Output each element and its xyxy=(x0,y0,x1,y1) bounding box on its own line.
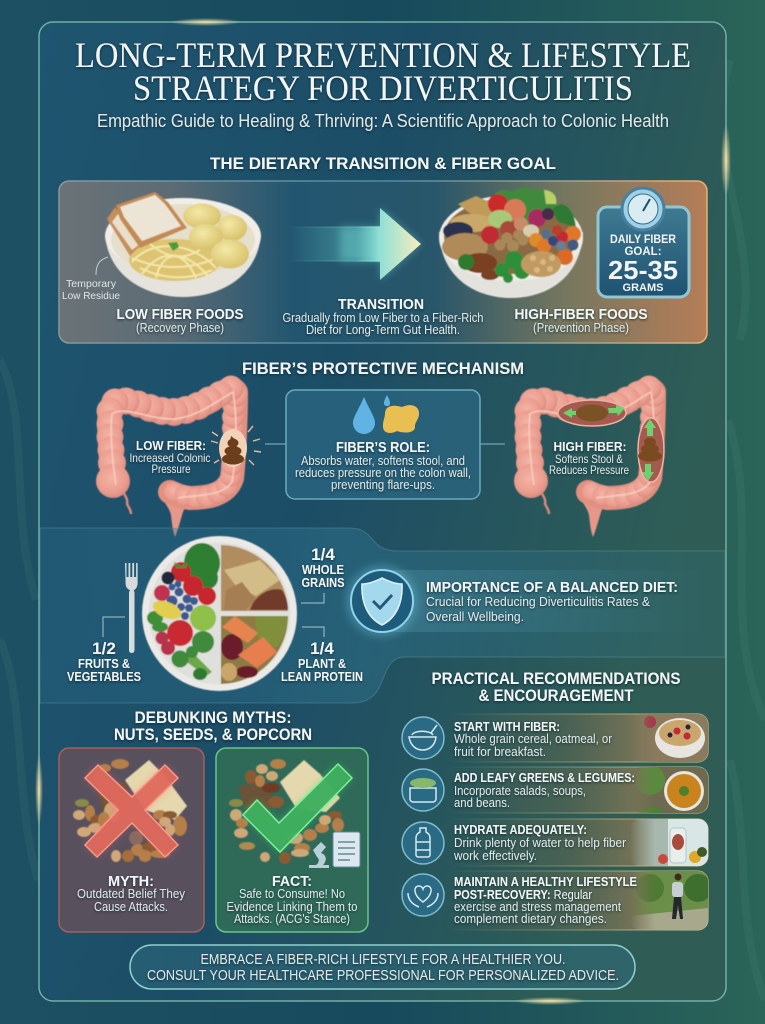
label: 1/4 whole grains xyxy=(302,545,344,590)
chart: balanced plate xyxy=(142,536,297,691)
fiber's role text: preventing flare-ups. xyxy=(331,478,435,492)
photo: jogger in park xyxy=(630,871,712,930)
row: start with fiber: fruit for breakfast. xyxy=(454,745,546,759)
heading: practical recommendations: PRACTICAL RECOMMENDATIONS xyxy=(432,670,680,688)
label: high fiber foods: (Prevention Phase) xyxy=(533,321,629,335)
label: low fiber: Pressure xyxy=(152,462,191,476)
photo: infused water xyxy=(630,819,708,866)
label: 1/4 plant and lean protein xyxy=(281,639,363,684)
nuts and popcorn pile xyxy=(229,759,344,864)
callout: temporary low residue: Temporary xyxy=(66,278,117,290)
label: 1/4 plant and lean protein: PLANT & xyxy=(298,657,346,671)
icon: stool, high fiber xyxy=(638,438,662,462)
heading: debunking myths xyxy=(114,709,312,744)
panel: fact xyxy=(216,748,368,932)
row: leafy greens and legumes: Incorporate salads, soups, xyxy=(454,784,586,798)
label: high fiber foods xyxy=(514,306,648,335)
fiber's role text: FIBER’S ROLE: xyxy=(336,439,430,456)
footer callout: EMBRACE A FIBER-RICH LIFESTYLE FOR A HEALTHIER YOU. xyxy=(200,952,566,968)
callout: importance of a balanced diet: IMPORTANCE OF A BALANCED DIET: xyxy=(426,579,678,596)
row: maintain a healthy lifestyle: exercise and stress management xyxy=(454,900,621,914)
fiber's role text: Absorbs water, softens stool, and xyxy=(301,454,465,468)
arrow: transition xyxy=(290,208,421,280)
label: low fiber: LOW FIBER: xyxy=(136,438,206,453)
icon: cereal bowl xyxy=(402,717,444,759)
callout: importance of a balanced diet: Overall Wellbeing. xyxy=(426,609,524,624)
icon: microscope xyxy=(309,842,329,868)
photo: oatmeal xyxy=(630,714,708,762)
fiber's role text xyxy=(295,439,471,492)
icon: red X xyxy=(85,765,178,857)
row: hydrate adequately xyxy=(402,819,708,866)
label: low fiber foods: (Recovery Phase) xyxy=(136,321,224,335)
heading: debunking myths: DEBUNKING MYTHS: xyxy=(134,709,292,727)
heading: practical recommendations xyxy=(432,670,680,705)
label: 1/4 whole grains: GRAINS xyxy=(302,576,344,590)
callout: importance of a balanced diet: Crucial for Reducing Diverticulitis Rates & xyxy=(426,594,650,609)
half: fruits and vegetables xyxy=(147,543,220,680)
icon: shield xyxy=(346,565,418,637)
callout: importance of a balanced diet xyxy=(346,565,704,637)
row: start with fiber: START WITH FIBER: xyxy=(454,720,560,734)
panel: myth: MYTH: xyxy=(108,874,154,890)
quarter: whole grains xyxy=(221,545,288,611)
icon: heart in hands xyxy=(402,874,444,916)
label: high fiber xyxy=(549,439,629,477)
icon: water bottle xyxy=(402,822,444,864)
row: start with fiber xyxy=(402,714,708,762)
icon: fork xyxy=(125,563,138,653)
heading: debunking myths: NUTS, SEEDS, & POPCORN xyxy=(114,726,312,744)
icon: green check xyxy=(243,764,352,852)
illustration: low fiber colon xyxy=(96,376,261,537)
panel: fact: FACT: xyxy=(272,874,312,890)
callout: daily fiber goal: 25-35 xyxy=(608,255,678,285)
label: high fiber foods: HIGH-FIBER FOODS xyxy=(514,306,648,323)
callout: daily fiber goal xyxy=(598,188,689,297)
illustration: high fiber colon xyxy=(514,376,666,537)
row: maintain a healthy lifestyle xyxy=(402,871,712,930)
label: 1/2 fruits and vegetables: FRUITS & xyxy=(78,657,130,671)
nuts and popcorn pile xyxy=(73,759,187,862)
label: low fiber foods: LOW FIBER FOODS xyxy=(116,306,244,323)
label: 1/2 fruits and vegetables: VEGETABLES xyxy=(67,670,141,684)
row: leafy greens and legumes xyxy=(402,765,708,816)
label: high fiber: Softens Stool & xyxy=(555,452,623,466)
row: hydrate adequately: Drink plenty of water to help fiber xyxy=(454,836,626,850)
row: hydrate adequately: work effectively. xyxy=(453,849,537,863)
panel: myth: Outdated Belief They xyxy=(77,887,186,901)
title: STRATEGY FOR DIVERTICULITIS xyxy=(133,68,633,108)
heading: protective mechanism: FIBER’S PROTECTIVE MECHANISM xyxy=(242,360,524,378)
text: transition xyxy=(282,296,484,337)
row: hydrate adequately: HYDRATE ADEQUATELY: xyxy=(454,823,587,837)
panel: myth: Cause Attacks. xyxy=(94,900,168,914)
label: low fiber: Increased Colonic xyxy=(130,451,210,465)
label: 1/4 plant and lean protein: LEAN PROTEIN xyxy=(281,670,363,684)
text: transition: Gradually from Low Fiber to a Fiber-Rich xyxy=(282,311,484,325)
footer callout: CONSULT YOUR HEALTHCARE PROFESSIONAL FOR PERSONALIZED ADVICE. xyxy=(147,968,619,984)
callout: temporary low residue xyxy=(62,257,120,302)
text: transition: Diet for Long-Term Gut Health. xyxy=(306,323,460,337)
panel: myth xyxy=(59,748,204,932)
icon: water drop xyxy=(353,395,390,434)
label: high fiber: HIGH FIBER: xyxy=(554,439,626,454)
icon: low fiber bowl xyxy=(105,192,261,297)
leader lines xyxy=(103,593,324,637)
fiber's role text: reduces pressure on the colon wall, xyxy=(295,466,471,480)
heading: dietary transition: THE DIETARY TRANSITION & FIBER GOAL xyxy=(210,155,556,173)
row: maintain a healthy lifestyle: POST-RECOVERY: Regular xyxy=(454,888,592,902)
panel: fiber's role xyxy=(286,390,480,499)
icon: sponge xyxy=(383,405,419,433)
icon: salad container xyxy=(402,769,444,811)
panel: fact: Evidence Linking Them to xyxy=(226,900,358,914)
label: 1/2 fruits and vegetables: 1/2 xyxy=(92,639,116,658)
callout: temporary low residue: Low Residue xyxy=(62,290,120,302)
icon: clipboard xyxy=(333,832,360,867)
connector lines xyxy=(265,443,505,445)
subtitle: Empathic Guide to Healing & Thriving: A Scientific Approach to Colonic Health xyxy=(97,111,669,131)
callout: daily fiber goal: DAILY FIBER xyxy=(610,234,677,246)
row: leafy greens and legumes: and beans. xyxy=(454,796,510,810)
label: 1/4 whole grains: 1/4 xyxy=(311,545,335,564)
icon: high fiber bowl xyxy=(439,188,583,298)
panel: fact: Safe to Consume! No xyxy=(239,887,345,901)
panel: fact: Attacks. (ACG's Stance) xyxy=(234,912,350,926)
quarter: protein xyxy=(221,616,288,684)
label: 1/4 plant and lean protein: 1/4 xyxy=(310,639,334,658)
panel: dietary transition xyxy=(59,181,707,343)
label: low fiber xyxy=(130,438,210,476)
label: 1/2 fruits and vegetables xyxy=(67,639,141,684)
callout: daily fiber goal: GOAL: xyxy=(624,246,662,258)
row: leafy greens and legumes: ADD LEAFY GREENS & LEGUMES: xyxy=(454,771,635,785)
footer callout xyxy=(130,945,635,989)
row: maintain a healthy lifestyle: MAINTAIN A HEALTHY LIFESTYLE xyxy=(454,875,637,889)
label: 1/4 whole grains: WHOLE xyxy=(302,563,344,577)
heading: practical recommendations: & ENCOURAGEMENT xyxy=(478,687,634,705)
label: high fiber: Reduces Pressure xyxy=(549,463,629,477)
label: low fiber foods xyxy=(116,306,244,335)
panel: balanced plate band xyxy=(40,528,725,703)
row: start with fiber: Whole grain cereal, oatmeal, or xyxy=(454,732,612,746)
title: LONG-TERM PREVENTION & LIFESTYLE xyxy=(75,35,691,75)
row: maintain a healthy lifestyle: complement dietary changes. xyxy=(454,912,607,926)
text: transition: TRANSITION xyxy=(338,296,424,313)
icon: stool, low fiber xyxy=(222,436,244,464)
title xyxy=(75,35,691,108)
photo: salad and soup xyxy=(637,767,708,813)
callout: daily fiber goal: GRAMS xyxy=(623,282,663,294)
